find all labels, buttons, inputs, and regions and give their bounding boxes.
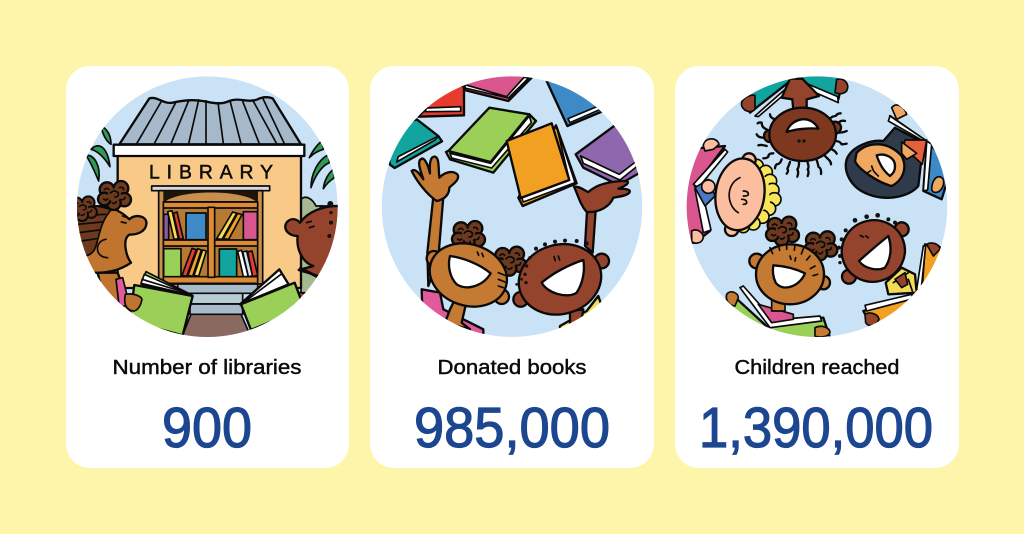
steps and path [178,284,258,339]
bookcase [152,186,270,284]
label: donated books: Donated books [438,357,586,379]
panel: donated books [370,66,654,468]
value: 900: 900 [162,396,252,460]
library sign: LIBRARY [149,162,273,183]
woman with dark headscarf [846,105,952,199]
flying books [383,73,640,206]
child on right [285,201,341,306]
panel: children reached [675,66,959,468]
roof [119,97,301,144]
boy with curly blond hair [685,139,781,243]
card background [66,66,349,468]
girl with two buns [726,217,837,343]
child on left [77,180,148,312]
child at top [741,71,848,177]
card background [370,66,654,468]
value: 985,000: 985,000 [414,396,610,460]
boy with raised arm [511,181,630,339]
illustration: children reading outside a library [69,76,341,339]
panel: number of libraries [66,66,349,468]
open books [125,269,304,335]
girl with raised arm [412,157,527,339]
illustration: children reading in a circle seen from above [685,71,952,343]
card background [675,66,959,468]
illustration: children throwing books in the air [382,73,642,339]
value: 1,390,000: 1,390,000 [699,396,933,460]
label: number of libraries: Number of libraries [112,357,302,379]
building wall [118,155,301,288]
child with short hair [833,211,945,326]
label: children reached: Children reached [734,357,900,379]
